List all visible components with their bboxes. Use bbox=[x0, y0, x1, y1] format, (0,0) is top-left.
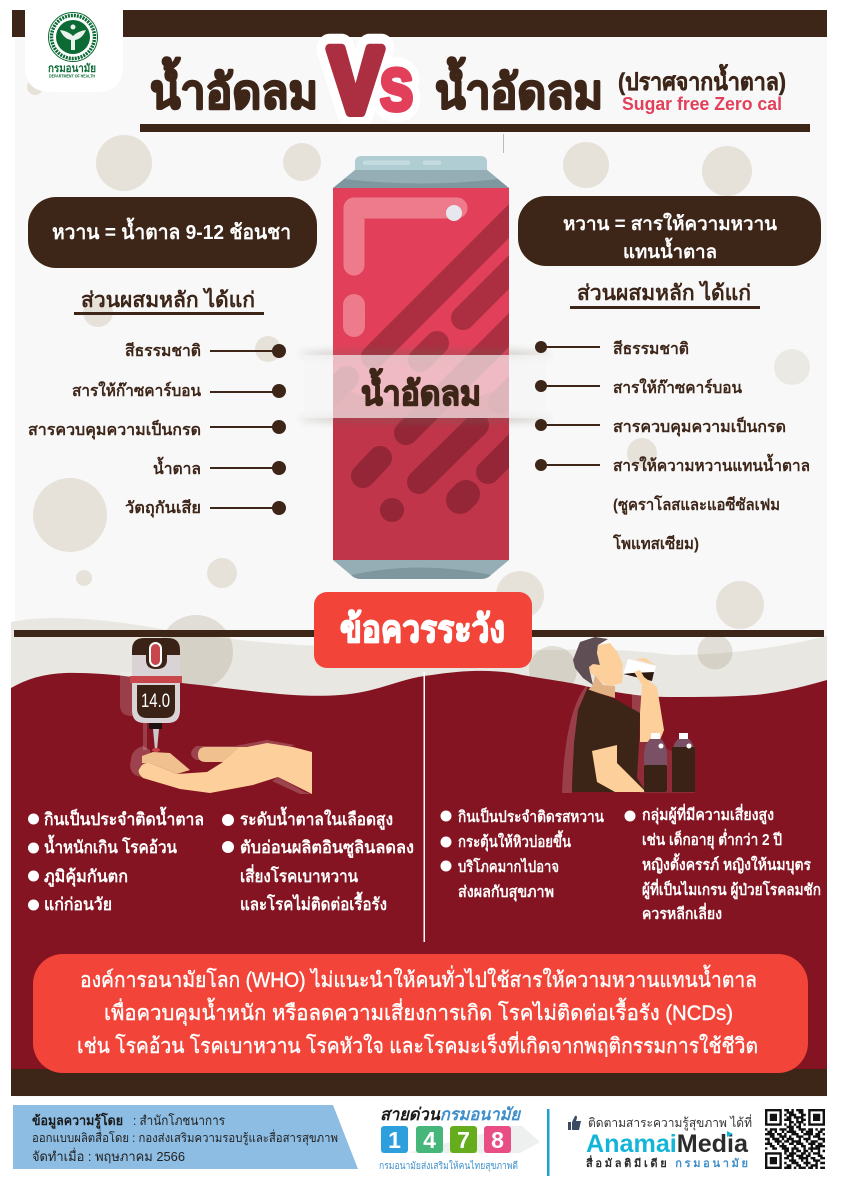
list: left ingredients: สารให้ก๊าซคาร์บอน bbox=[72, 381, 201, 400]
header bar bbox=[12, 10, 827, 37]
list: right warning column 2: ผู้ที่เป็นไมเกรน ผู้ป่วยโรคลมชัก bbox=[642, 878, 821, 901]
list: left warning column 1: แก่ก่อนวัย bbox=[44, 895, 112, 914]
list: left warning column 1 bbox=[28, 806, 204, 914]
can label band: น้ำอัดลม bbox=[361, 368, 481, 413]
title: Vs badge: V bbox=[329, 30, 382, 132]
callout: WHO recommendation: องค์การอนามัยโลก (WHO) ไม่แนะนำให้คนทั่วไปใช้สารให้ความหวานแทนน้ำตาล bbox=[80, 965, 757, 992]
title left: soft drink: น้ำอัดลม bbox=[150, 57, 318, 118]
list: left warning column 2: ระดับน้ำตาลในเลือดสูง bbox=[240, 806, 393, 831]
title right: sugar free note: (ปราศจากน้ำตาล) bbox=[618, 63, 786, 96]
list: right warning column 2: หญิงตั้งครรภ์ หญิงให้นมบุตร bbox=[642, 853, 812, 875]
title bbox=[150, 30, 786, 132]
illustration: man drinking soda bbox=[562, 637, 695, 793]
panel: left sweetness pill: หวาน = น้ำตาล 9-12 ช้อนชา bbox=[52, 217, 291, 244]
footer: Anamai Media: AnamaiMedia bbox=[586, 1130, 749, 1158]
callout: WHO recommendation: เพื่อควบคุมน้ำหนัก หรือลดความเสี่ยงการเกิด โรคไม่ติดต่อเรื้อรัง (NCDs) bbox=[104, 998, 733, 1026]
list: right warning column 1: กระตุ้นให้หิวบ่อยขึ้น bbox=[458, 830, 571, 852]
heading: right ingredients: ส่วนผสมหลัก ได้แก่ bbox=[577, 280, 751, 305]
title: Vs badge: s bbox=[379, 39, 414, 127]
footer: hotline 1478: สายด่วนกรมอนามัย bbox=[380, 1105, 522, 1124]
logo: department of health: DEPARTMENT OF HEALTH bbox=[49, 74, 95, 78]
illustration: soda can bbox=[300, 156, 550, 579]
list: left warning column 2: ตับอ่อนผลิตอินซูลินลดลง bbox=[240, 838, 414, 859]
list: left warning column 2 bbox=[222, 806, 414, 914]
subtitle: Sugar free Zero cal bbox=[622, 94, 782, 114]
list: right warning column 2: กลุ่มผู้ที่มีความเสี่ยงสูง bbox=[642, 803, 774, 826]
footer: credits panel bbox=[13, 1105, 358, 1169]
footer: hotline 1478: 7 bbox=[457, 1127, 470, 1153]
logo: department of health bbox=[25, 10, 123, 92]
list: right ingredients: (ซูคราโลสและแอซีซัลเฟม bbox=[613, 494, 780, 516]
QR code bbox=[765, 1109, 825, 1169]
title rule bbox=[140, 124, 810, 132]
footer: hotline 1478: 1 bbox=[388, 1127, 401, 1153]
list: right ingredients: สารควบคุมความเป็นกรด bbox=[613, 415, 786, 437]
list: left warning column 1: กินเป็นประจำติดน้ำตาล bbox=[44, 806, 204, 829]
footer: hotline 1478: 8 bbox=[491, 1127, 504, 1153]
list: left ingredients: วัตถุกันเสีย bbox=[125, 498, 201, 518]
panel: right sweetness pill bbox=[518, 196, 821, 266]
list: right warning column 2: เช่น เด็กอายุ ต่ำกว่า 2 ปี bbox=[642, 828, 782, 850]
icon: thumbs up bbox=[568, 1116, 581, 1130]
list: right warning column 1: กินเป็นประจำติดรสหวาน bbox=[458, 806, 604, 826]
list: right ingredients: สารให้ก๊าซคาร์บอน bbox=[613, 378, 742, 397]
list: right ingredients: สีธรรมชาติ bbox=[613, 339, 689, 358]
panel: right sweetness pill: แทนน้ำตาล bbox=[623, 237, 717, 263]
list: right warning column 1 bbox=[440, 806, 604, 902]
footer: credits panel: : สำนักโภชนาการ bbox=[133, 1113, 225, 1128]
footer: hotline 1478 bbox=[379, 1105, 540, 1172]
callout: WHO recommendation bbox=[33, 954, 808, 1073]
heading: warning: ข้อควรระวัง bbox=[340, 609, 505, 651]
list: left ingredients: สารควบคุมความเป็นกรด bbox=[28, 418, 201, 440]
panel: left sweetness pill bbox=[28, 197, 317, 268]
footer: hotline 1478: 4 bbox=[423, 1127, 436, 1153]
background circles bbox=[27, 79, 810, 629]
illustration: glucose meter and hand: 14.0 bbox=[141, 691, 170, 712]
panel: right sweetness pill: หวาน = สารให้ความหวาน bbox=[563, 212, 777, 235]
list: right ingredients: โพแทสเซียม) bbox=[612, 533, 699, 553]
footer: hotline 1478: กรมอนามัยส่งเสริมให้คนไทยสุขภาพดี bbox=[379, 1160, 518, 1172]
footer: Anamai Media bbox=[568, 1114, 752, 1170]
title: Vs badge: V bbox=[329, 30, 382, 132]
callout: WHO recommendation: เช่น โรคอ้วน โรคเบาหวาน โรคหัวใจ และโรคมะเร็งที่เกิดจากพฤติกรรมการใช้ชีวิต bbox=[77, 1031, 758, 1058]
footer: Anamai Media: สื่อมัลติมีเดีย กรมอนามัย bbox=[586, 1155, 748, 1170]
list: left warning column 2: เสี่ยงโรคเบาหวาน bbox=[240, 864, 358, 886]
list: right ingredients: สารให้ความหวานแทนน้ำตาล bbox=[613, 453, 810, 475]
list: right warning column 1: บริโภคมากไปอาจ bbox=[458, 857, 559, 876]
title right: soft drink: น้ำอัดลม bbox=[435, 57, 603, 118]
heading: left ingredients: ส่วนผสมหลัก ได้แก่ bbox=[81, 287, 255, 312]
title: Vs badge: s bbox=[379, 39, 414, 127]
footer: credits panel: ออกแบบผลิตสื่อโดย : กองส่งเสริมความรอบรู้และสื่อสารสุขภาพ bbox=[32, 1129, 338, 1146]
list: left ingredients bbox=[28, 341, 286, 518]
list: left warning column 1: ภูมิคุ้มกันตก bbox=[44, 867, 128, 888]
footer: Anamai Media: ติดตามสาระความรู้สุขภาพ ได้ที่ bbox=[588, 1114, 752, 1131]
list: left warning column 2: และโรคไม่ติดต่อเรื้อรัง bbox=[240, 891, 387, 914]
bottle 2 bbox=[672, 733, 695, 792]
footer: credits panel: จัดทำเมื่อ : พฤษภาคม 2566 bbox=[32, 1148, 185, 1164]
logo: department of health: กรมอนามัย bbox=[48, 62, 96, 75]
list: left ingredients: น้ำตาล bbox=[153, 456, 201, 478]
list: right warning column 1: ส่งผลกับสุขภาพ bbox=[458, 884, 554, 902]
can label band bbox=[300, 351, 550, 422]
list: right warning column 2: ควรหลีกเลี่ยง bbox=[642, 902, 722, 923]
footer: credits panel: ข้อมูลความรู้โดย bbox=[32, 1112, 123, 1129]
list: right warning column 2 bbox=[624, 803, 821, 923]
heading: warning bbox=[314, 592, 532, 668]
panel: warning section bbox=[11, 615, 827, 1096]
illustration: glucose meter and hand bbox=[120, 638, 312, 794]
list: right ingredients bbox=[535, 339, 810, 553]
list: left ingredients: สีธรรมชาติ bbox=[125, 341, 201, 360]
list: left warning column 1: น้ำหนักเกิน โรคอ้วน bbox=[44, 834, 177, 857]
bottle 1 bbox=[644, 733, 667, 792]
